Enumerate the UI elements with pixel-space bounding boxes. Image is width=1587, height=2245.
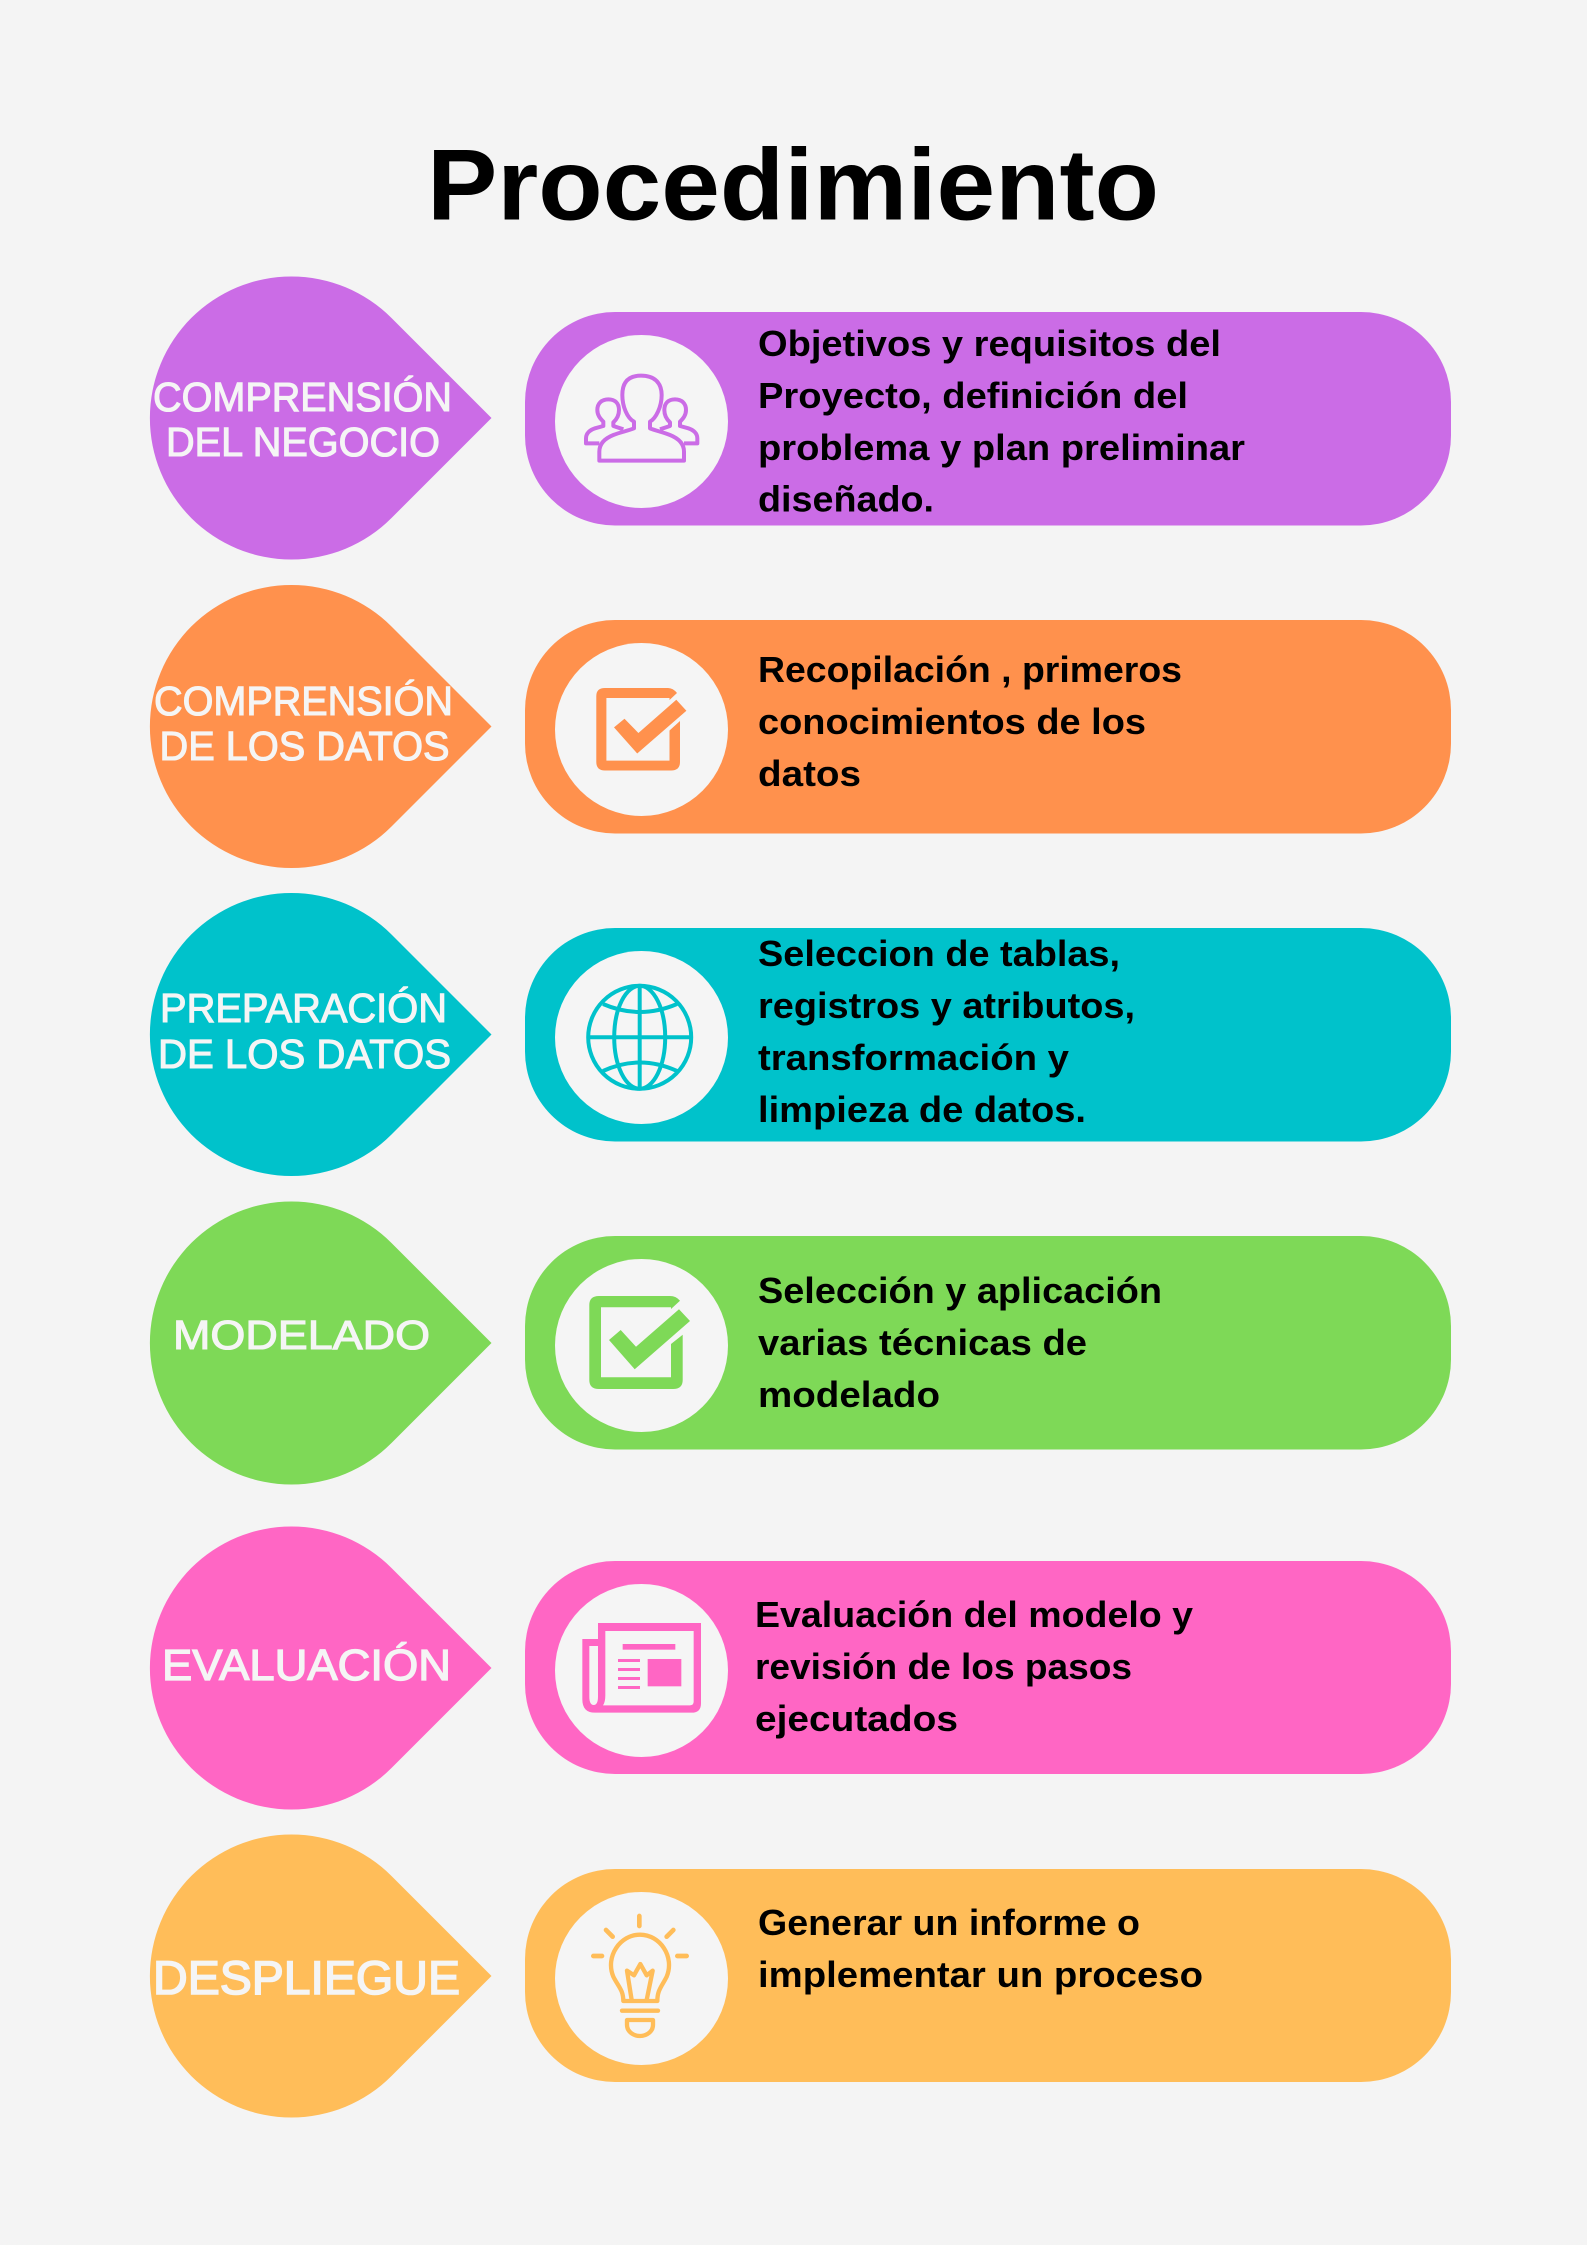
icon circle	[555, 1259, 728, 1432]
icon circle	[555, 1584, 728, 1757]
label: modelado: MODELADO	[173, 1312, 430, 1358]
drop shape: modelado	[150, 1201, 491, 1485]
description: Objetivos y requisitos del	[758, 323, 1221, 364]
pill	[525, 312, 1451, 526]
description: varias técnicas de	[758, 1322, 1087, 1363]
label: comprensión de los datos: DE LOS DATOS	[160, 723, 450, 769]
drop shape: preparación de los datos	[150, 893, 491, 1176]
icon: globe	[588, 986, 691, 1089]
label: evaluación: EVALUACIÓN	[162, 1641, 451, 1690]
description: Recopilación , primeros	[758, 649, 1182, 690]
label: preparación de los datos	[158, 985, 451, 1077]
label: comprensión de los datos: COMPRENSIÓN	[154, 678, 453, 724]
description: Generar un informe o	[758, 1902, 1140, 1943]
description: diseñado.	[758, 478, 934, 520]
icon: light bulb	[593, 1916, 687, 2036]
icon: people	[586, 376, 697, 461]
description: Seleccion de tablas,	[758, 933, 1120, 974]
description: registros y atributos,	[758, 985, 1135, 1026]
description: Selección y aplicación	[758, 1270, 1162, 1311]
description: problema y plan preliminar	[758, 427, 1245, 468]
description: ejecutados	[755, 1698, 958, 1739]
description: datos	[758, 753, 861, 794]
label: comprensión del negocio: COMPRENSIÓN	[153, 374, 452, 420]
pill	[525, 1236, 1451, 1450]
description: implementar un proceso	[758, 1954, 1203, 1995]
label: preparación de los datos: DE LOS DATOS	[158, 1031, 451, 1077]
description	[758, 649, 1182, 794]
icon circle	[555, 335, 728, 508]
panel: comprensión del negocio	[150, 276, 1451, 559]
description: modelado	[758, 1374, 940, 1415]
label: despliegue: DESPLIEGUE	[153, 1951, 460, 2004]
description	[758, 933, 1135, 1130]
drop shape: evaluación	[150, 1526, 491, 1810]
description: revisión de los pasos	[755, 1646, 1132, 1687]
icon: checkbox	[589, 1296, 690, 1389]
panel: modelado	[150, 1201, 1451, 1485]
pill	[525, 1869, 1451, 2082]
label: comprensión del negocio	[153, 374, 452, 465]
description: Evaluación del modelo y	[755, 1594, 1193, 1635]
icon: newspaper	[582, 1623, 701, 1713]
icon: checkbox	[596, 688, 686, 770]
title: Procedimiento	[427, 130, 1159, 242]
panel: preparación de los datos	[150, 893, 1451, 1176]
description: Proyecto, definición del	[758, 375, 1188, 416]
icon circle	[555, 643, 728, 816]
description	[755, 1594, 1193, 1739]
panel: despliegue	[150, 1834, 1451, 2118]
pill	[525, 1561, 1451, 1774]
description: conocimientos de los	[758, 701, 1146, 742]
description	[758, 1902, 1203, 1995]
label: comprensión del negocio: DEL NEGOCIO	[166, 419, 440, 465]
drop shape: despliegue	[150, 1834, 491, 2118]
label: preparación de los datos: PREPARACIÓN	[160, 985, 447, 1031]
description: limpieza de datos.	[758, 1089, 1086, 1130]
description	[758, 323, 1245, 520]
icon circle	[555, 1892, 728, 2065]
drop shape: comprensión de los datos	[150, 585, 492, 868]
pill	[525, 928, 1451, 1142]
pill	[525, 620, 1451, 834]
drop shape: comprensión del negocio	[150, 276, 492, 559]
panel: evaluación	[150, 1526, 1451, 1810]
label: comprensión de los datos	[154, 678, 453, 769]
description	[758, 1270, 1162, 1415]
icon circle	[555, 951, 728, 1124]
description: transformación y	[758, 1037, 1069, 1078]
panel: comprensión de los datos	[150, 585, 1451, 868]
